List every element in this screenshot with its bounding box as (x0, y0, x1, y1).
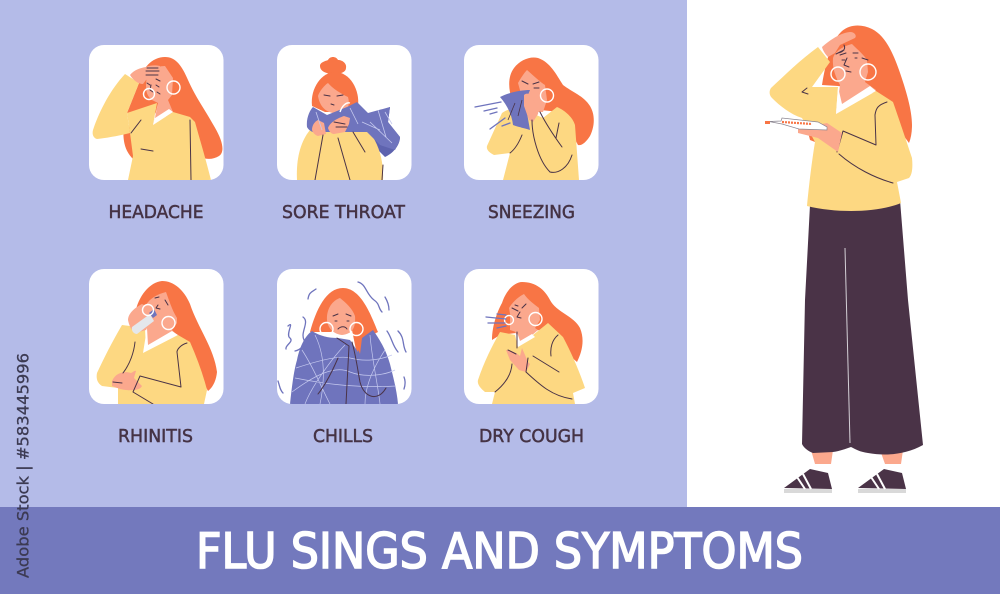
hand under thermometer (798, 123, 842, 152)
illustration: standing woman with thermometer (765, 25, 923, 493)
panel: symptom card sore throat (277, 45, 412, 180)
shoe left (784, 469, 832, 493)
sweater (770, 47, 912, 211)
title: FLU SINGS AND SYMPTOMS (196, 523, 803, 580)
panel: symptom card dry cough (464, 269, 598, 404)
panel: symptom card chills (277, 269, 412, 404)
icon: woman with scarf (297, 57, 400, 180)
text: chills label: CHILLS (313, 427, 373, 447)
panel: lavender symptoms background (0, 0, 687, 508)
raised hand (822, 32, 856, 57)
text: stock id caption: Adobe Stock | #583445996 (14, 353, 32, 578)
collar (836, 86, 876, 114)
legs (811, 450, 903, 464)
text: sore throat label: SORE THROAT (282, 203, 405, 223)
hair (808, 25, 912, 143)
icon: woman sneezing into tissue (475, 57, 594, 180)
text: rhinitis label: RHINITIS (118, 427, 193, 447)
icon: woman using nasal spray (97, 281, 217, 404)
face details (836, 45, 868, 72)
thermometer (765, 118, 827, 130)
shoe right (858, 469, 906, 493)
panel: symptom card rhinitis (89, 269, 224, 404)
panel: symptom card headache (89, 45, 224, 180)
text: headache label: HEADACHE (108, 203, 204, 223)
panel: symptom card sneezing (464, 45, 598, 180)
icon: woman wrapped in blanket (278, 282, 406, 404)
banner: title bar (0, 507, 1000, 594)
trousers (802, 200, 923, 454)
icon: woman coughing (478, 282, 585, 404)
face and neck (833, 44, 876, 114)
icon: woman holding forehead (93, 57, 222, 180)
earrings (860, 64, 876, 80)
text: dry cough label: DRY COUGH (479, 427, 584, 447)
text: sneezing label: SNEEZING (488, 203, 575, 223)
